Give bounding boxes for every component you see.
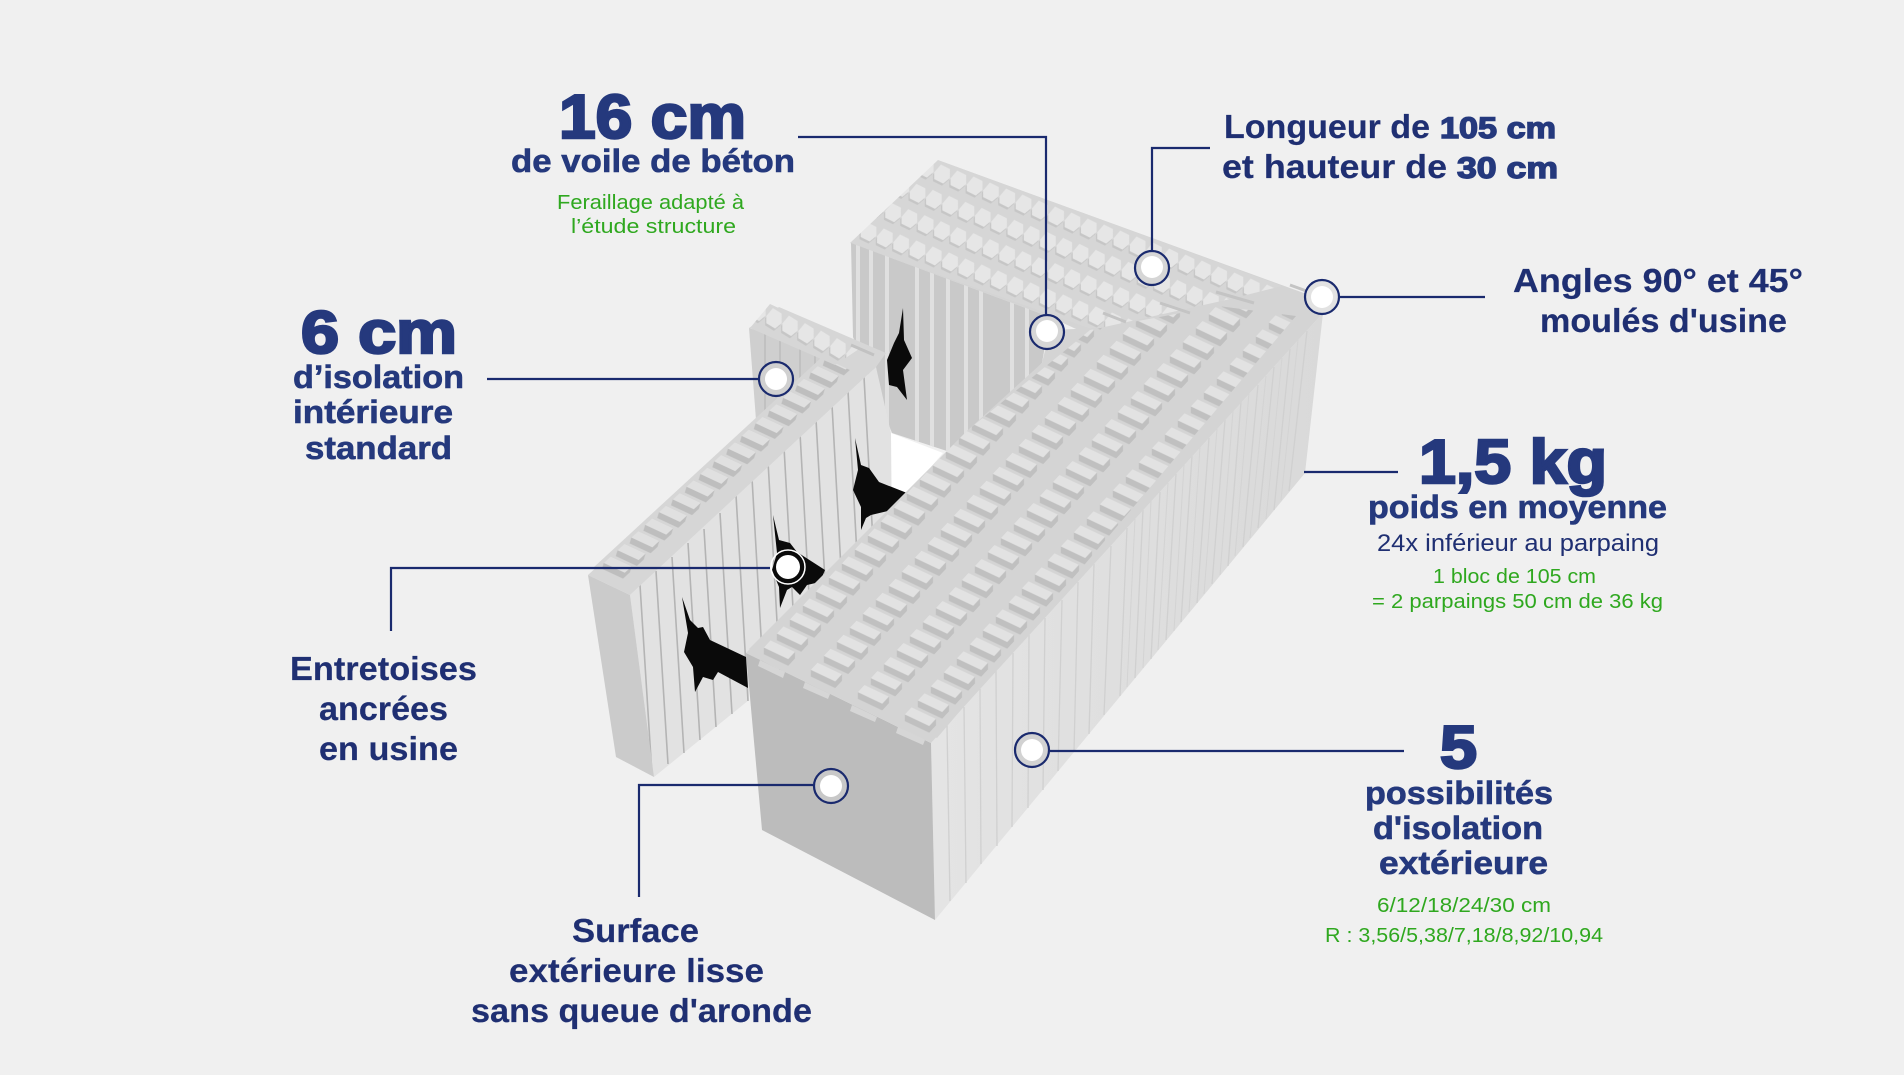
callout: 6 cm <box>293 299 464 466</box>
callout: 5 possibilités: extérieure <box>1379 845 1548 881</box>
front face <box>746 653 935 920</box>
callout: angles <box>1513 262 1803 339</box>
callout: entretoises: ancrées <box>319 690 448 727</box>
callout: 1,5 kg <box>1368 428 1667 613</box>
marker: 16 cm <box>1030 315 1064 349</box>
icon: spacer tie, front <box>682 597 748 692</box>
main block <box>746 285 1323 920</box>
icon: spacer tie, back <box>887 308 912 400</box>
callout: longueur et hauteur <box>1222 108 1558 185</box>
icon: spacer tie, anchored <box>772 515 825 608</box>
marker: 5 possibilités <box>1015 733 1049 767</box>
callout: 1,5 kg: 1,5 kg <box>1419 428 1607 497</box>
left wall <box>588 304 891 777</box>
callout: longueur et hauteur: 105 cm <box>1440 112 1556 145</box>
back wall <box>850 160 1323 470</box>
marker: angles <box>1305 280 1339 314</box>
callout lines <box>391 137 1485 897</box>
callout: 6 cm: 6 cm <box>301 299 457 366</box>
callout: longueur et hauteur: et hauteur de <box>1222 148 1447 185</box>
callout: 5 possibilités: 6/12/18/24/30 cm <box>1377 895 1551 917</box>
icon: spacer tie, middle <box>853 438 907 530</box>
callout: 5 possibilités: 5 <box>1440 714 1477 781</box>
callout: surface: sans queue d'aronde <box>471 992 812 1029</box>
callout: 1,5 kg: poids en moyenne <box>1368 489 1667 525</box>
callout: 5 possibilités: d'isolation <box>1373 810 1543 846</box>
callout: 1,5 kg: 24x inférieur au parpaing <box>1377 530 1659 557</box>
callout: 6 cm: intérieure <box>293 394 453 430</box>
callout: 16 cm: Feraillage adapté à <box>557 192 745 214</box>
callout: 16 cm: l’étude structure <box>571 216 736 238</box>
callout: 5 possibilités: R : 3,56/5,38/7,18/8,92/10,94 <box>1325 925 1603 947</box>
callout: 16 cm <box>511 83 795 238</box>
top surface <box>746 288 1323 743</box>
callout: longueur et hauteur: 30 cm <box>1457 152 1558 185</box>
callout: 1,5 kg: = 2 parpaings 50 cm de 36 kg <box>1372 591 1663 613</box>
callout: angles: moulés d'usine <box>1540 302 1787 339</box>
marker: entretoises <box>771 550 805 584</box>
callout: 5 possibilités: possibilités <box>1365 775 1553 811</box>
callout: 1,5 kg: 1 bloc de 105 cm <box>1433 566 1596 588</box>
callout: 16 cm: 16 cm <box>559 83 746 152</box>
callout: angles: Angles 90° et 45° <box>1513 262 1803 299</box>
callout: 6 cm: d’isolation <box>293 359 464 395</box>
right face <box>931 313 1323 920</box>
callout: 16 cm: de voile de béton <box>511 143 795 179</box>
illustration: insulating formwork block <box>588 160 1323 920</box>
marker: 6 cm <box>759 362 793 396</box>
callout: surface: Surface <box>572 912 699 949</box>
opening between walls <box>891 433 943 497</box>
marker: longueur <box>1135 251 1169 285</box>
callout: entretoises: Entretoises <box>290 650 477 687</box>
callout: entretoises <box>290 650 477 767</box>
callout: 6 cm: standard <box>305 430 452 466</box>
callout: longueur et hauteur: Longueur de <box>1224 108 1430 145</box>
callout: surface <box>471 912 812 1029</box>
callout: entretoises: en usine <box>319 730 458 767</box>
callout: 5 possibilités <box>1325 714 1603 947</box>
callout: surface: extérieure lisse <box>509 952 764 989</box>
marker: surface <box>814 769 848 803</box>
